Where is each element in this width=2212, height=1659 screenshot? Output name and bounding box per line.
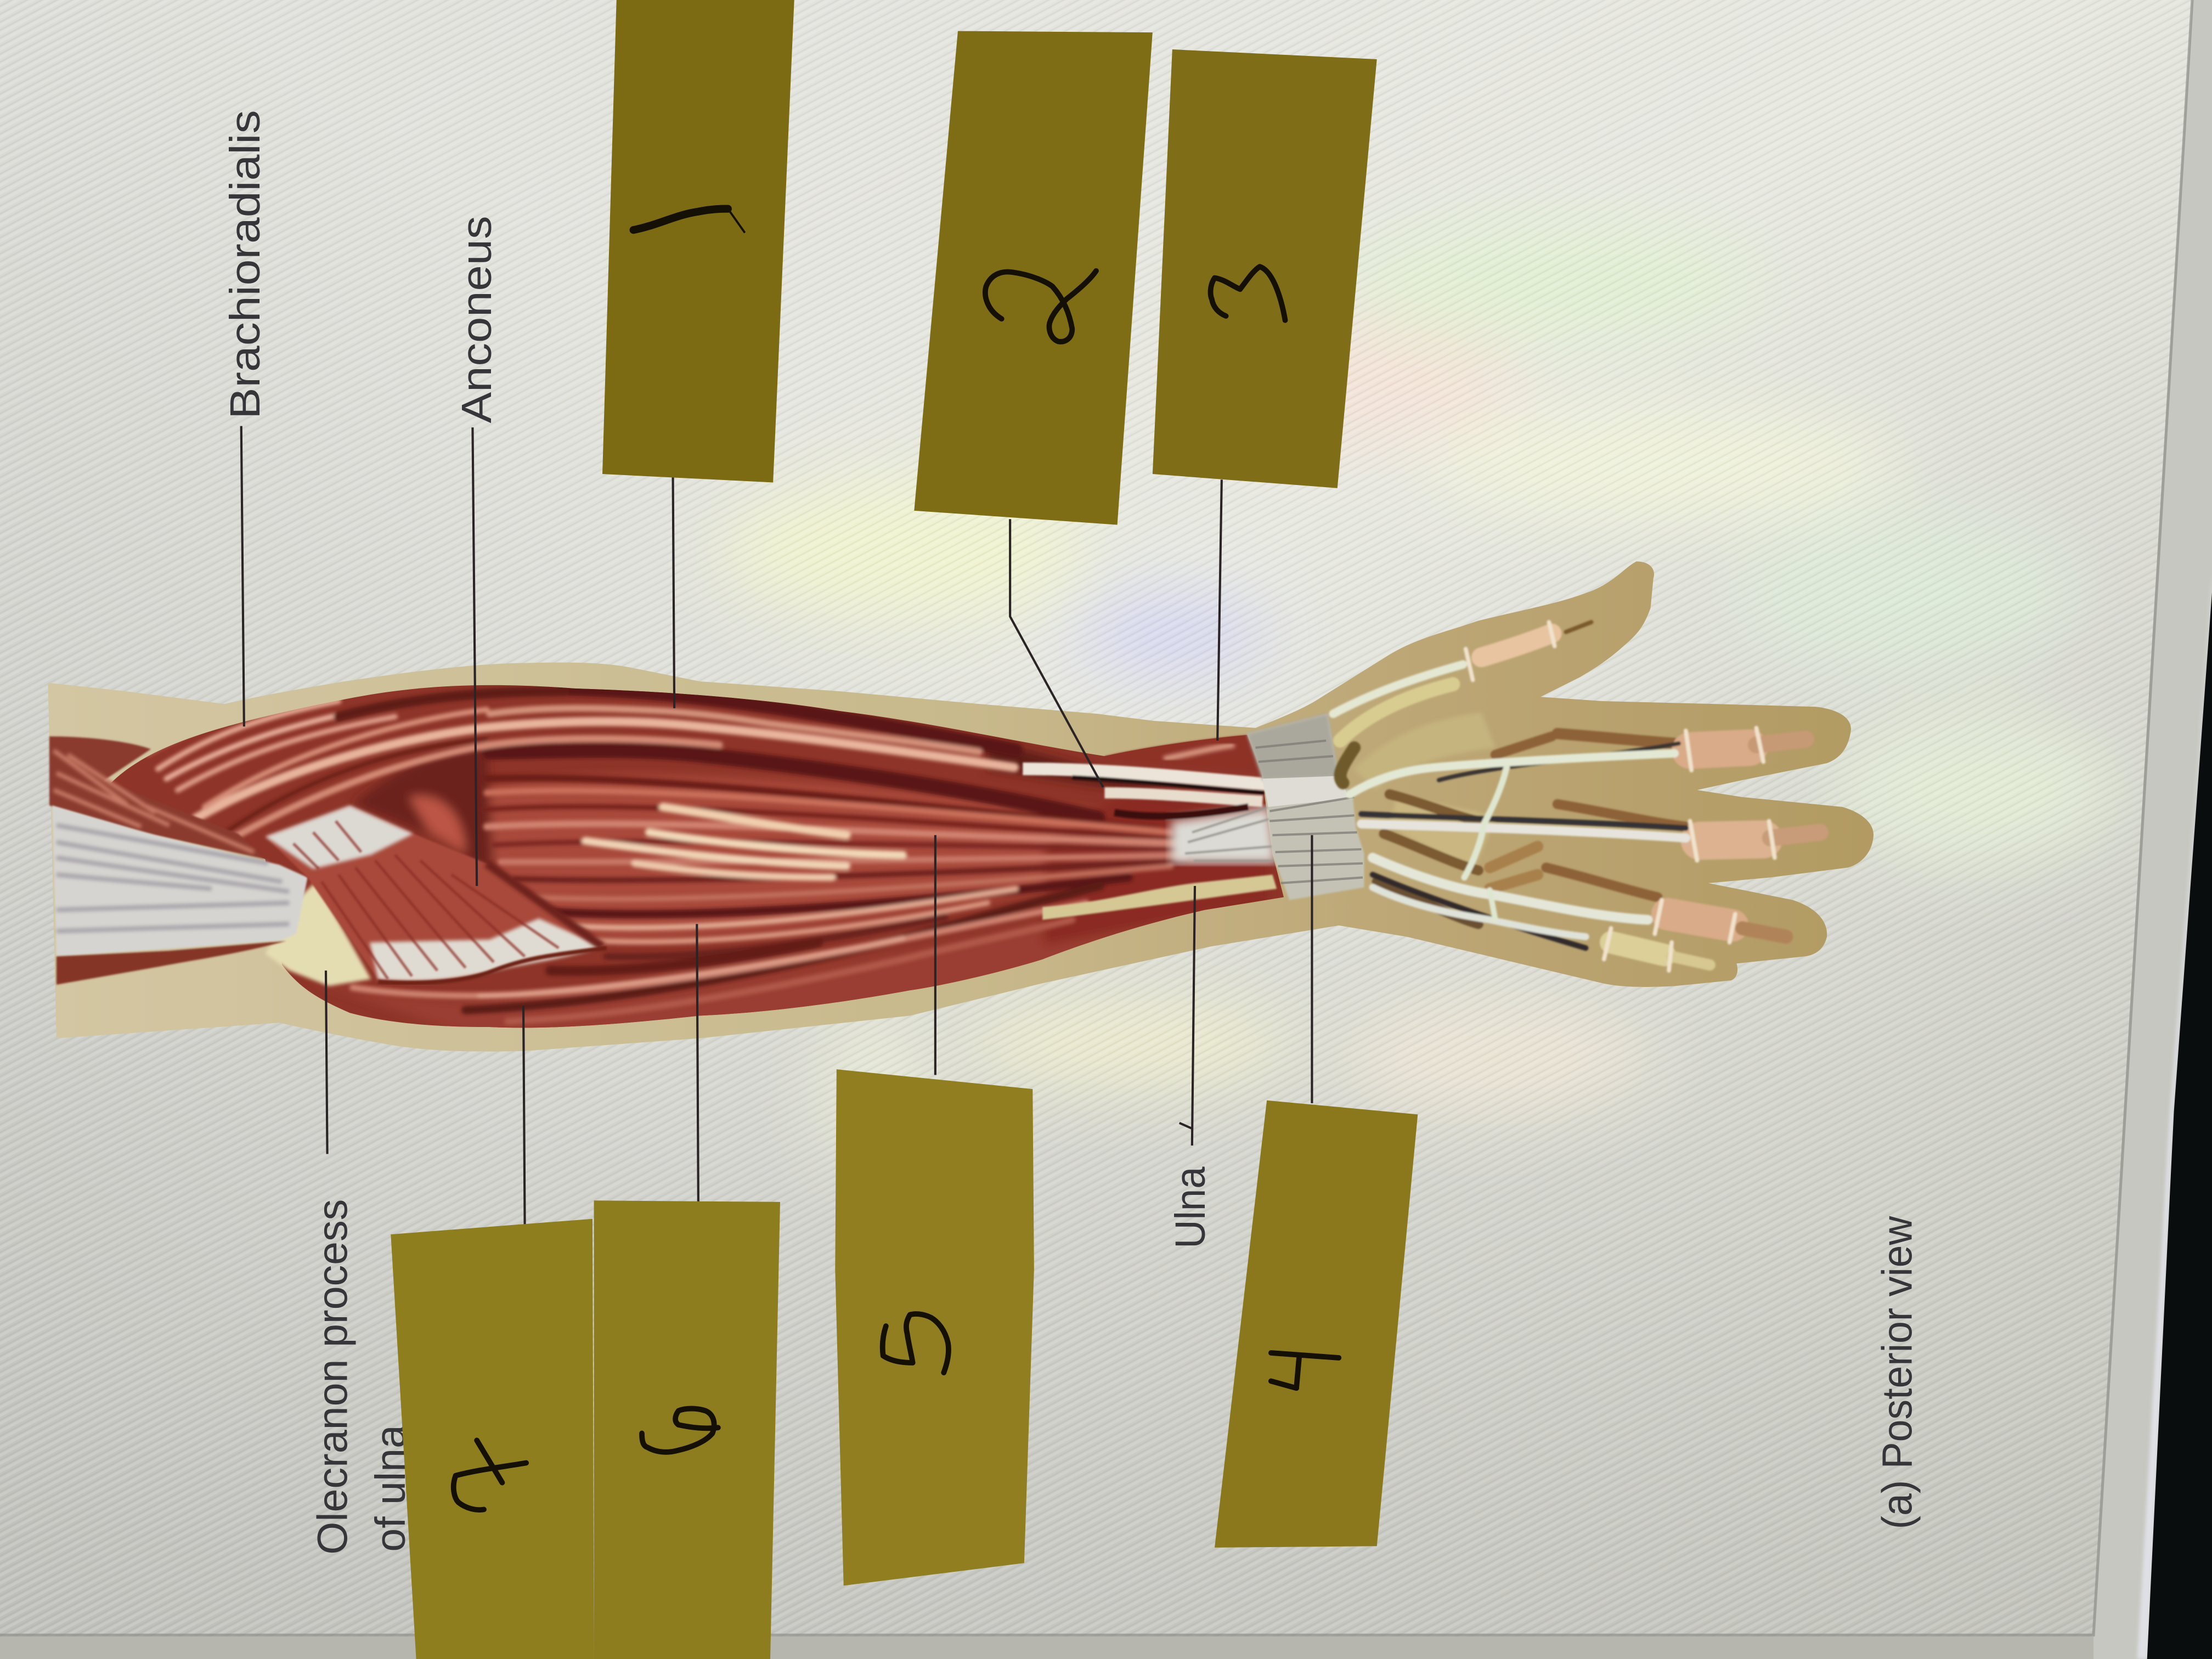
sticky note 2: [914, 31, 1153, 525]
sticky note 4: [1215, 1101, 1418, 1548]
sticky note 7: [391, 1219, 594, 1659]
hand bones and tendons: [1333, 622, 1820, 970]
sticky note 6: [594, 1200, 780, 1659]
joint rings: [1466, 622, 1775, 970]
sticky note 1: [602, 0, 794, 482]
triceps tendon: [52, 805, 308, 956]
tendon shadows: [1439, 743, 1679, 780]
extensor tendons on the hand: [1333, 664, 1463, 714]
olecranon process bone: [265, 882, 371, 986]
label: of ulna: of ulna: [367, 1425, 414, 1552]
finger bones: [1481, 634, 1552, 657]
ulna bone strip: [1042, 874, 1277, 920]
caption: posterior view: (a) Posterior view: [1874, 1216, 1921, 1529]
leader lines: [241, 426, 1312, 1224]
pale highlights on the muscle belly: [663, 807, 847, 835]
brachioradialis fibres: [158, 701, 338, 769]
extensor tendons above the wrist: [1023, 735, 1277, 864]
sticky note 3: [1153, 49, 1377, 488]
metacarpal and muscle shading: [1340, 684, 1453, 741]
extensor digitorum fibres: [487, 778, 1157, 830]
label: Brachioradialis: Brachioradialis: [222, 110, 269, 419]
extensor retinaculum at wrist: [1247, 714, 1364, 900]
label: Anconeus: Anconeus: [453, 216, 500, 423]
skin silhouette of forearm and hand: [48, 561, 1874, 1052]
extensor carpi ulnaris fibres: [466, 886, 1101, 1010]
top band fibres: [565, 689, 1015, 751]
lower triceps strip: [57, 941, 286, 985]
sticky note 5: [835, 1069, 1034, 1585]
triceps muscle: [49, 736, 265, 859]
pale dorsal patches: [1355, 713, 1496, 790]
arm illustration: [48, 561, 1874, 1058]
anconeus muscle: [265, 805, 607, 983]
muscle mass: [111, 685, 1284, 1028]
label: Olecranon process: Olecranon process: [309, 1199, 357, 1555]
label: Ulna: Ulna: [1167, 1166, 1214, 1249]
